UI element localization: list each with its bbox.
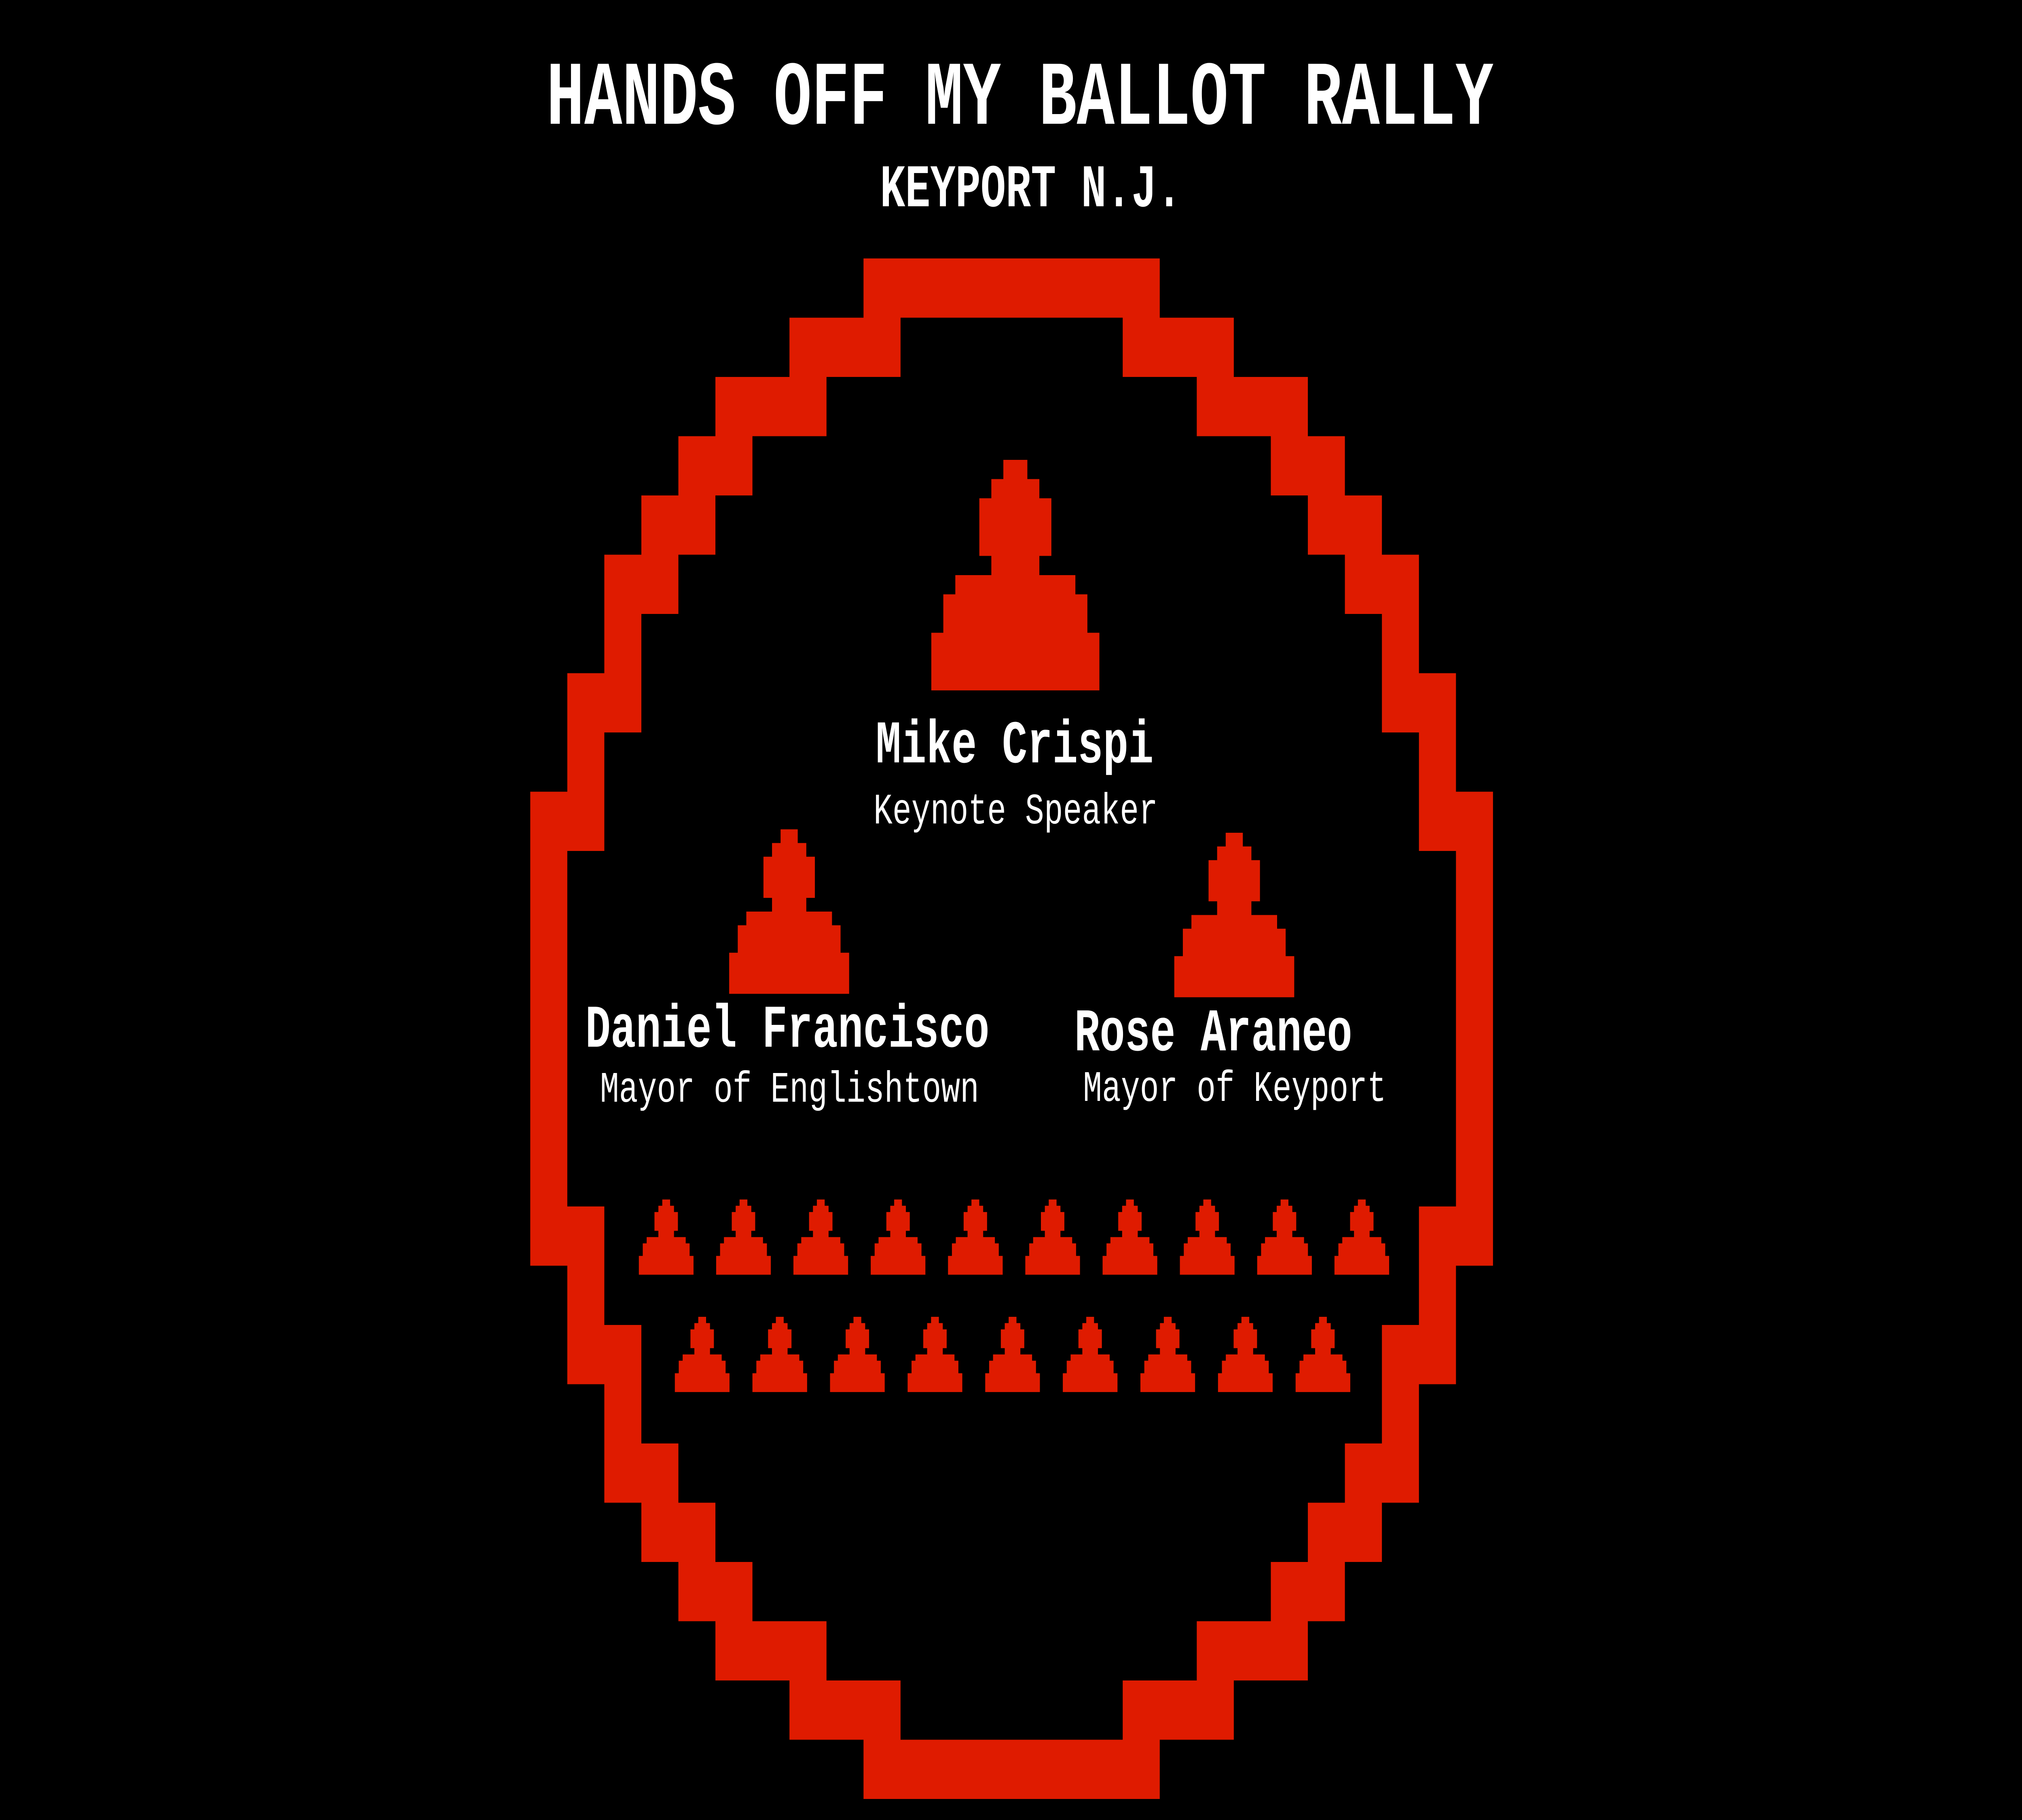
icon: crowd figure	[1180, 1200, 1235, 1275]
icon: crowd figure	[948, 1200, 1003, 1275]
crowd: back row of nine figures	[675, 1317, 1350, 1392]
speaker role: Mayor of Englishtown: Mayor of Englishtown	[600, 1066, 979, 1115]
icon: crowd figure	[675, 1317, 730, 1392]
icon: crowd figure	[1140, 1317, 1195, 1392]
icon: crowd figure	[753, 1317, 807, 1392]
icon: crowd figure	[1218, 1317, 1273, 1392]
speaker name: Rose Araneo: Rose Araneo	[1074, 1000, 1352, 1069]
icon: crowd figure	[1257, 1200, 1312, 1275]
icon: Rose Araneo figure	[1174, 833, 1294, 997]
icon: crowd figure	[907, 1317, 962, 1392]
speaker: Rose Araneo	[1074, 833, 1386, 1114]
speaker role: Keynote Speaker: Keynote Speaker	[874, 788, 1158, 837]
icon: crowd figure	[1025, 1200, 1080, 1275]
icon: crowd figure	[1102, 1200, 1157, 1275]
speaker: Daniel Francisco	[586, 829, 990, 1115]
subtitle: location: KEYPORT N.J.	[880, 156, 1182, 224]
icon: crowd figure	[1296, 1317, 1350, 1392]
icon: crowd figure	[985, 1317, 1040, 1392]
icon: crowd figure	[639, 1200, 694, 1275]
icon: keynote speaker figure	[931, 460, 1100, 690]
speaker name: Mike Crispi: Mike Crispi	[876, 712, 1153, 781]
icon: crowd figure	[871, 1200, 925, 1275]
crowd: front row of ten figures	[639, 1200, 1389, 1275]
speaker role: Mayor of Keyport: Mayor of Keyport	[1083, 1065, 1386, 1114]
pixel ring arena outline	[530, 258, 1493, 1799]
icon: crowd figure	[1063, 1317, 1117, 1392]
speaker: Mike Crispi	[874, 460, 1158, 837]
icon: crowd figure	[793, 1200, 848, 1275]
icon: Daniel Francisco figure	[729, 829, 849, 994]
icon: crowd figure	[830, 1317, 885, 1392]
icon: crowd figure	[1335, 1200, 1389, 1275]
title: HANDS OFF MY BALLOT RALLY	[546, 49, 1493, 152]
speaker name: Daniel Francisco: Daniel Francisco	[586, 997, 990, 1065]
icon: crowd figure	[716, 1200, 771, 1275]
